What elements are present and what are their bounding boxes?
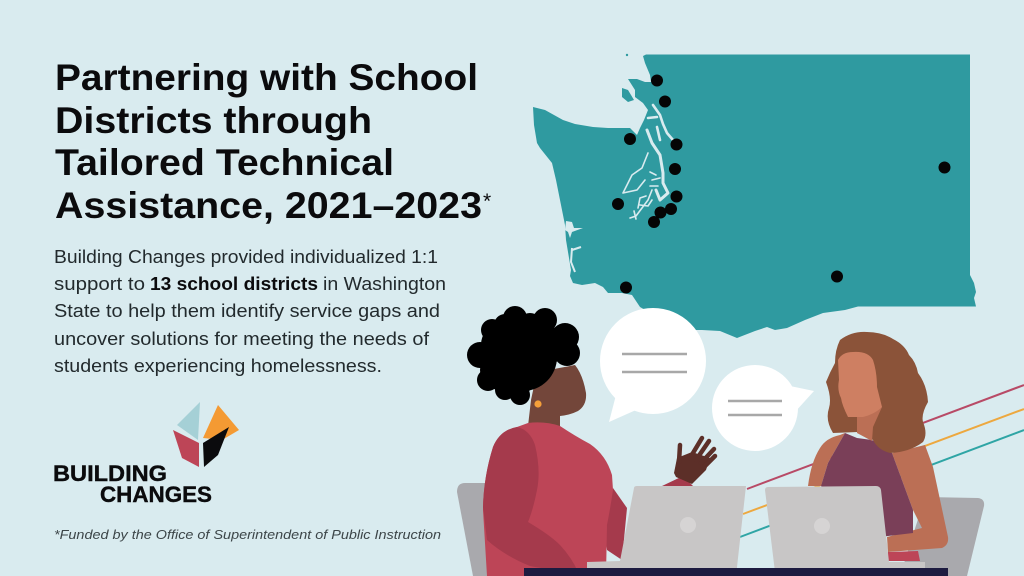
school district dots <box>612 74 950 294</box>
laptop: right <box>765 486 925 572</box>
title <box>55 57 491 226</box>
chair: right <box>900 497 984 576</box>
speech bubble: left <box>600 308 706 422</box>
face <box>838 352 882 417</box>
hair <box>826 332 928 453</box>
logo: Building Changes <box>53 402 239 507</box>
logo: Building Changes: CHANGES <box>100 482 212 507</box>
person: right woman <box>808 332 948 561</box>
body text: 13 school districts <box>150 274 318 294</box>
body text <box>54 247 446 376</box>
title: Assistance, 2021–2023 <box>55 185 482 226</box>
title: * <box>483 190 491 213</box>
chair: left <box>457 483 492 576</box>
map: Washington State <box>533 54 976 338</box>
decorative diagonal lines <box>740 385 1024 537</box>
laptop: left <box>587 486 746 572</box>
title: Partnering with School <box>55 57 478 98</box>
sweater shade <box>483 427 578 572</box>
body text: in Washington <box>323 274 446 294</box>
body text: students experiencing homelessness. <box>54 356 382 376</box>
body text: uncover solutions for meeting the needs of <box>54 329 430 349</box>
body text: State to help them identify service gaps and <box>54 301 440 321</box>
neck and face <box>528 365 586 428</box>
logo: Building Changes: BUILDING <box>53 461 167 486</box>
sleeve and hand <box>662 476 693 486</box>
neck <box>857 407 882 441</box>
title: Districts through <box>55 100 372 141</box>
hair <box>467 306 580 405</box>
arms <box>808 433 845 486</box>
table <box>524 568 948 576</box>
earring <box>534 400 542 408</box>
body text: support to <box>54 274 145 294</box>
far arm <box>602 488 627 560</box>
speech bubble: right <box>712 365 814 451</box>
puget sound channels <box>623 105 673 219</box>
skirt <box>888 551 920 561</box>
person: left woman <box>467 306 715 576</box>
footnote: *Funded by the Office of Superintendent of Public Instruction <box>54 527 441 542</box>
title: Tailored Technical <box>55 142 394 183</box>
body text: Building Changes provided individualized 1:1 <box>54 247 438 267</box>
dress <box>821 433 913 537</box>
sweater <box>483 422 613 576</box>
